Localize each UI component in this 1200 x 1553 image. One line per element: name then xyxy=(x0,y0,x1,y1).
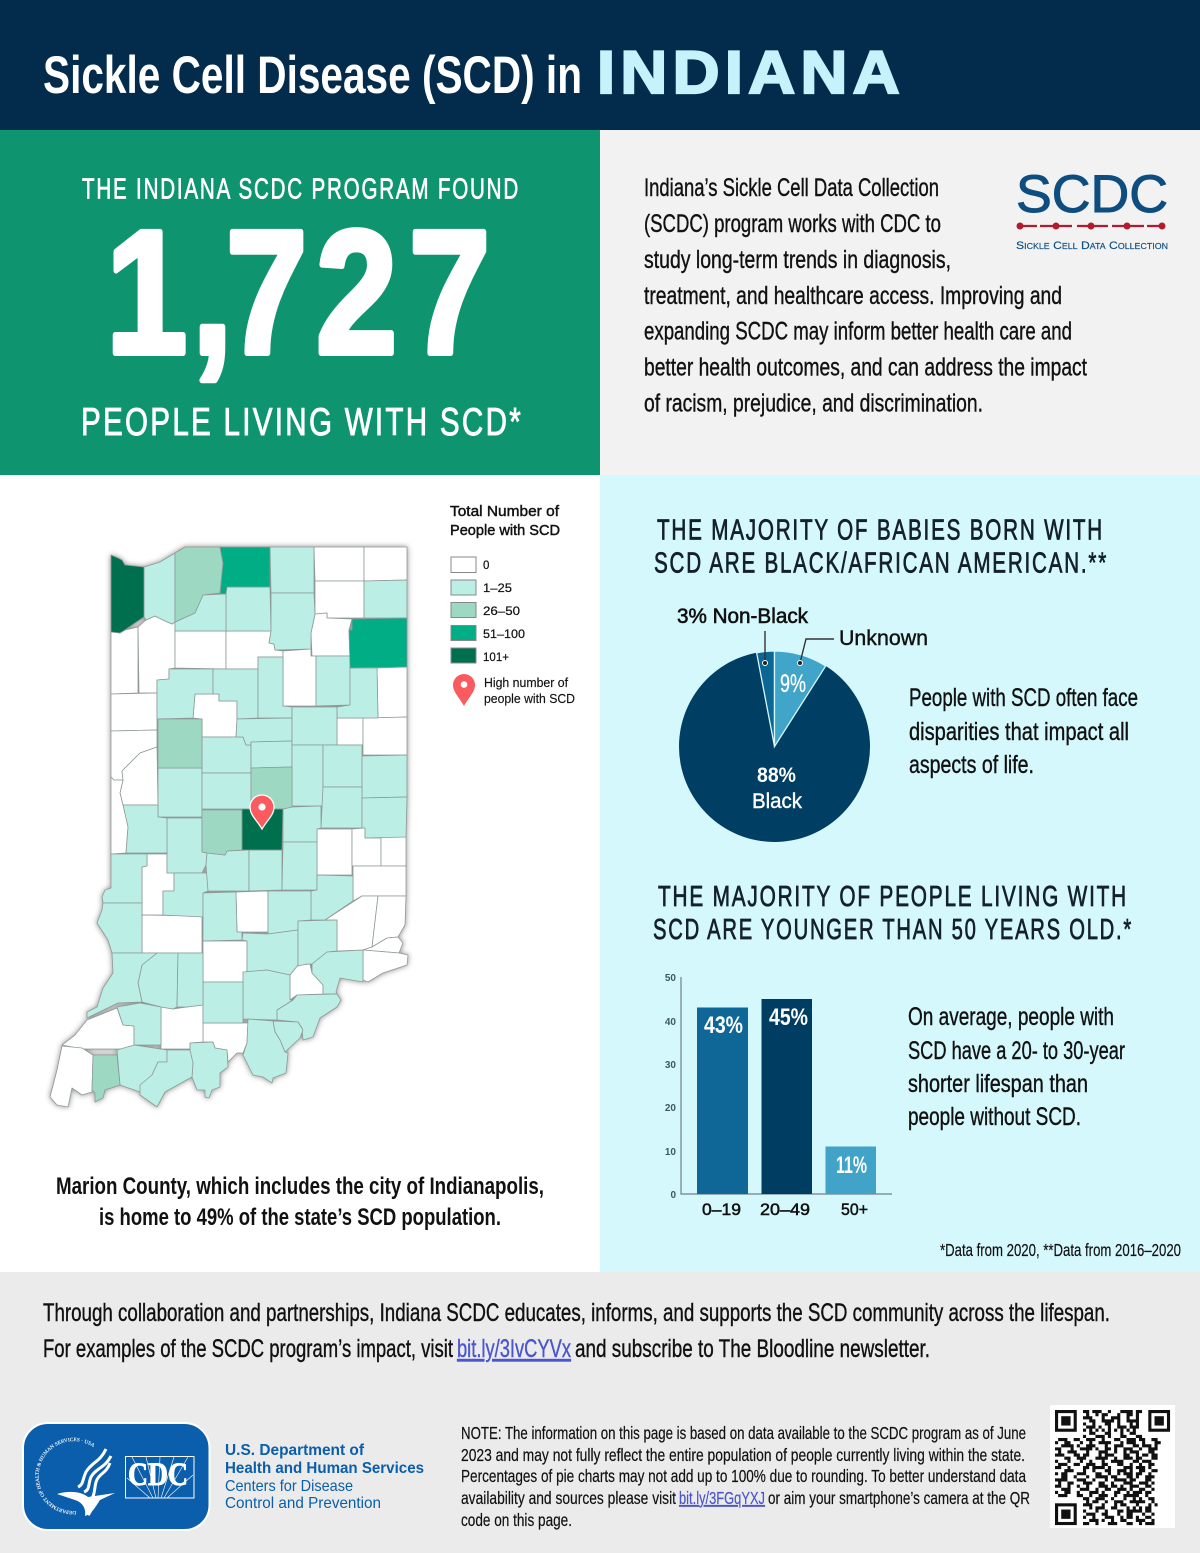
note text: NOTE: The information on this page is based on data available to the SCDC program as of June xyxy=(461,1423,1026,1443)
note text: code on this page. xyxy=(461,1510,572,1530)
bar chart: 0 xyxy=(670,1190,676,1201)
note text xyxy=(461,1423,1030,1530)
panel: about SCDC: of racism, prejudice, and discrimination. xyxy=(644,390,983,418)
header banner: Sickle Cell Disease (SCD) in xyxy=(43,46,582,105)
text: lifespan: people without SCD. xyxy=(908,1103,1081,1131)
text: lifespan: On average, people with xyxy=(908,1003,1114,1031)
slice: non-Black 3% xyxy=(757,651,774,746)
pie chart: Black xyxy=(752,790,802,813)
footer panel xyxy=(0,1272,1200,1553)
pie chart: 3% Non-Black xyxy=(677,605,808,628)
note text: Percentages of pie charts may not add up to 100% due to rounding. To better understand data xyxy=(461,1466,1026,1486)
QR code xyxy=(1050,1405,1175,1528)
bar chart: 30 xyxy=(665,1060,676,1071)
panel: about SCDC: Indiana’s Sickle Cell Data Collection xyxy=(644,174,939,202)
map caption: Marion County, which includes the city of Indianapolis, xyxy=(56,1173,544,1200)
text: lifespan: shorter lifespan than xyxy=(908,1070,1088,1098)
pie chart: Unknown xyxy=(839,627,928,650)
bar chart: 10 xyxy=(665,1147,676,1158)
bar: 0-19: 43% xyxy=(704,1012,743,1039)
bar: 0-19 xyxy=(697,1008,748,1194)
heading: babies born with SCD xyxy=(654,514,1108,580)
text: lifespan xyxy=(908,1003,1125,1131)
map legend: 26–50 xyxy=(483,606,520,618)
text: disparities xyxy=(909,684,1138,779)
map pin: Marion County xyxy=(250,795,274,829)
map legend: Total Number of xyxy=(450,504,560,520)
footer statement: bit.ly/3IvCYVx xyxy=(457,1335,571,1363)
panel: 1,727 people statistic: THE INDIANA SCDC PROGRAM FOUND xyxy=(82,174,520,206)
pie chart: 9% xyxy=(780,670,806,698)
panel: about SCDC xyxy=(600,130,1200,475)
agency name: Control and Prevention xyxy=(225,1495,381,1512)
bar chart: 0–19 xyxy=(702,1200,741,1219)
note text: availability and sources please visit xyxy=(461,1488,676,1508)
CDC/HHS logo badge xyxy=(22,1422,210,1531)
agency name: Centers for Disease xyxy=(225,1478,353,1495)
bar: 20-49 xyxy=(762,999,812,1194)
agency name: Health and Human Services xyxy=(225,1460,424,1477)
map legend: High number of xyxy=(484,676,569,690)
bar chart: 20–49 xyxy=(760,1200,810,1219)
map of Indiana counties xyxy=(50,547,408,1107)
panel: 1,727 people statistic: PEOPLE LIVING WITH SCD* xyxy=(81,401,523,444)
HHS seal: DEPARTMENT OF HEALTH & HUMAN SERVICES · USA xyxy=(35,1438,94,1514)
panel: about SCDC: treatment, and healthcare access. Improving and xyxy=(644,282,1062,310)
panel: about SCDC: (SCDC) program works with CDC to xyxy=(644,210,941,238)
counties: 26-50 people xyxy=(92,547,292,1102)
bar chart xyxy=(665,973,892,1219)
note text: bit.ly/3FGqYXJ xyxy=(679,1488,765,1508)
map legend: people with SCD xyxy=(484,692,575,706)
counties: 0 people xyxy=(50,547,408,1107)
slice: unknown 9% xyxy=(774,651,826,746)
bar: 20-49: 45% xyxy=(769,1004,808,1031)
text: disparities: aspects of life. xyxy=(909,751,1034,779)
map caption: is home to 49% of the state’s SCD population. xyxy=(99,1204,501,1231)
map caption xyxy=(56,1173,544,1231)
bar chart: 50+ xyxy=(841,1200,868,1219)
note text: 2023 and may not fully reflect the entire population of people currently living within the state. xyxy=(461,1445,1025,1465)
bar chart: 40 xyxy=(665,1017,676,1028)
map legend: People with SCD xyxy=(450,523,560,539)
counties: 51-100 people xyxy=(220,547,407,668)
map legend: 51–100 xyxy=(483,629,525,641)
bar chart: 50 xyxy=(665,973,676,984)
agency name: U.S. Department of xyxy=(225,1442,365,1459)
CDC box: CDC xyxy=(128,1457,188,1493)
map legend: 101+ xyxy=(483,652,509,664)
header banner xyxy=(0,0,1200,130)
panel: about SCDC: study long-term trends in diagnosis, xyxy=(644,246,951,274)
SCDC logo xyxy=(1016,165,1168,252)
bar: 50+ xyxy=(826,1146,876,1194)
footer statement xyxy=(43,1299,1110,1363)
legend pin icon xyxy=(453,674,475,706)
text: lifespan: SCD have a 20- to 30-year xyxy=(908,1037,1125,1065)
panel: 1,727 people statistic xyxy=(0,130,600,475)
panel: 1,727 people statistic: 1,727 xyxy=(106,195,490,391)
map legend: 0 xyxy=(483,560,489,572)
header banner: INDIANA xyxy=(597,39,905,106)
bar chart: 20 xyxy=(665,1103,676,1114)
SCDC logo: SCDC xyxy=(1016,165,1168,224)
footer statement: For examples of the SCDC program’s impact, visit xyxy=(43,1335,453,1363)
SCDC logo: Sickle Cell Data Collection xyxy=(1016,240,1168,252)
note text: or aim your smartphone’s camera at the QR xyxy=(768,1488,1030,1508)
counties: 101+ people xyxy=(111,555,283,850)
bar: 50+: 11% xyxy=(836,1152,867,1179)
heading: people younger than 50 xyxy=(653,881,1133,946)
counties: 1-25 people xyxy=(87,547,407,1107)
footer statement: and subscribe to The Bloodline newsletter. xyxy=(575,1335,930,1363)
pie chart: 88% xyxy=(757,764,796,787)
map legend: 1–25 xyxy=(483,583,512,595)
text: disparities: disparities that impact all xyxy=(909,718,1129,746)
map legend xyxy=(450,504,575,706)
agency name xyxy=(225,1442,424,1512)
pie chart xyxy=(677,605,928,842)
